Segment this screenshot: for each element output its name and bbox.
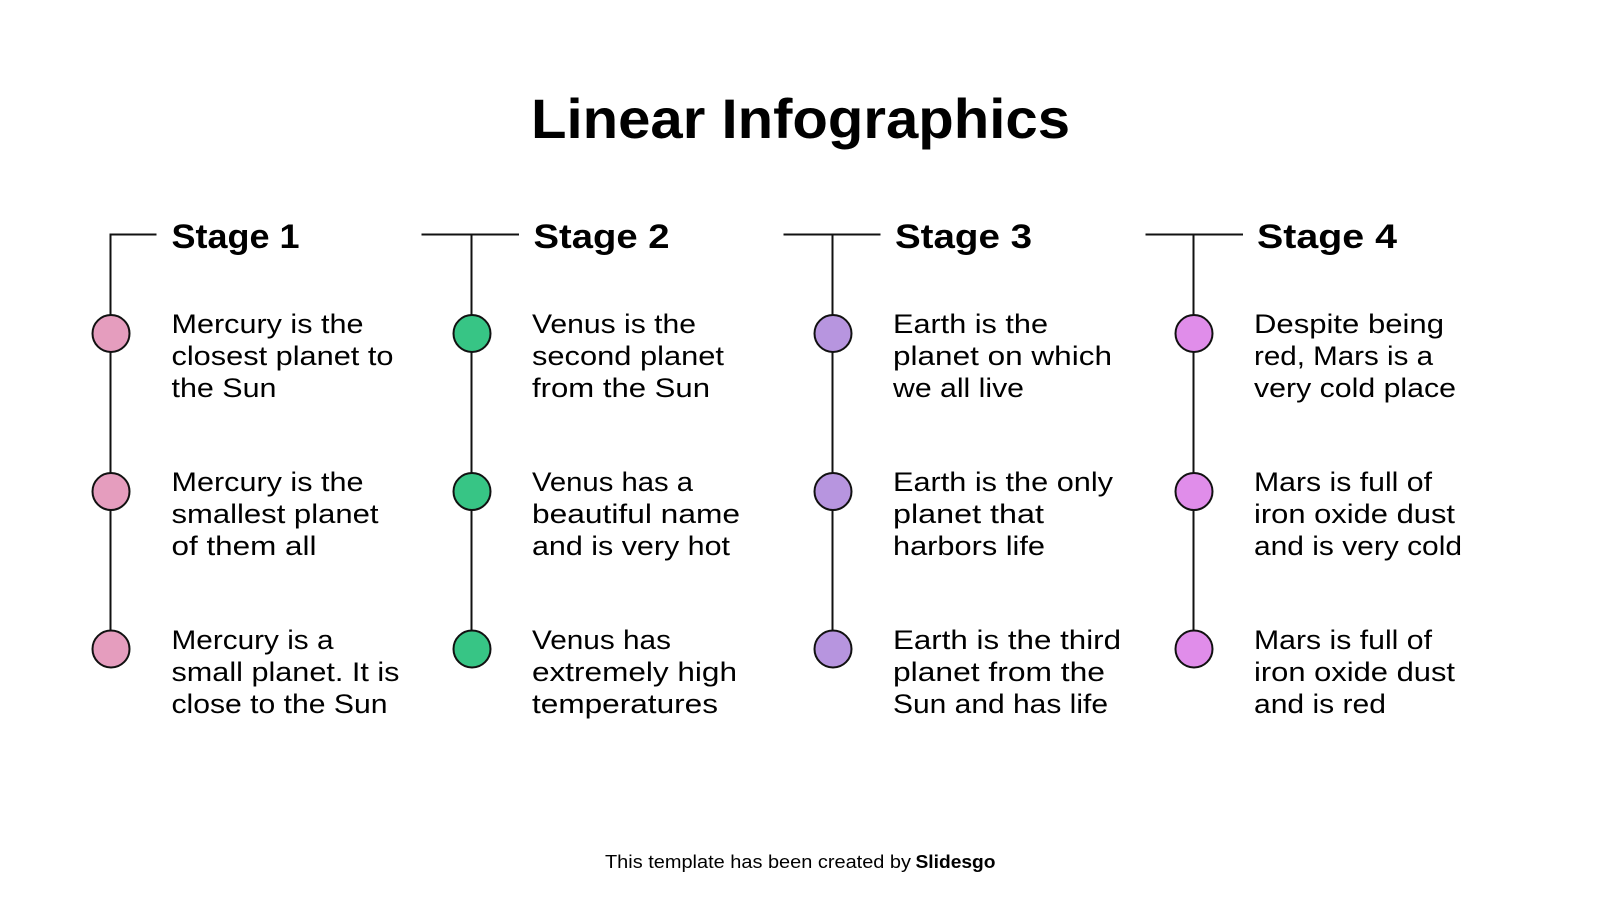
text: stage 2 item 1: Venus is the — [532, 309, 696, 339]
text: stage 2 item 2: Venus has a — [532, 467, 693, 497]
marker: stage 4 item 3 — [1176, 630, 1212, 668]
marker: stage 1 item 3 — [92, 630, 130, 668]
text: stage 3 item 1: we all live — [892, 373, 1024, 403]
text: stage 3 item 3: planet from the — [893, 657, 1105, 687]
panel: stage 3 — [784, 218, 1121, 719]
text: stage 2 item 2: and is very hot — [532, 531, 731, 561]
text: stage 1 item 3: Mercury is a — [172, 625, 334, 655]
footer credit: Slidesgo — [916, 851, 996, 872]
text: stage 4 item 2: and is very cold — [1254, 531, 1462, 561]
text: stage 2 item 1: second planet — [532, 341, 725, 371]
marker: stage 3 item 3 — [814, 630, 852, 668]
text: stage 3 item 2: planet that — [893, 499, 1045, 529]
marker: stage 4 item 2 — [1176, 473, 1212, 510]
text: stage 3 item 3: Sun and has life — [893, 689, 1108, 719]
text: stage 4 item 1: red, Mars is a — [1254, 341, 1433, 371]
text: stage 3 item 3: Earth is the third — [893, 625, 1121, 655]
text: stage 4 item 3: Mars is full of — [1254, 625, 1433, 655]
text: stage 3 item 2: Earth is the only — [893, 467, 1114, 497]
text: stage 3 item 2: harbors life — [893, 531, 1045, 561]
heading: stage 2: Stage 2 — [534, 218, 670, 256]
text: stage 4 item 2: iron oxide dust — [1254, 499, 1456, 529]
marker: stage 1 item 1 — [92, 315, 130, 352]
text: stage 1 item 2: of them all — [172, 531, 316, 561]
text: stage 4 item 1: Despite being — [1254, 309, 1444, 339]
text: stage 1 item 3: small planet. It is — [172, 657, 400, 687]
text: stage 1 item 2: smallest planet — [172, 499, 379, 529]
text: stage 1 item 2: Mercury is the — [172, 467, 364, 497]
text: stage 3 item 1: planet on which — [893, 341, 1112, 371]
marker: stage 2 item 1 — [454, 315, 490, 352]
panel: stage 1 — [92, 218, 400, 719]
heading: stage 3: Stage 3 — [895, 218, 1032, 256]
text: stage 4 item 3: iron oxide dust — [1254, 657, 1456, 687]
text: stage 2 item 3: extremely high — [532, 657, 737, 687]
panel: stage 2 — [422, 218, 740, 719]
text: stage 2 item 3: Venus has — [532, 625, 671, 655]
connector line: stage 3 — [784, 234, 880, 649]
text: stage 1 item 3: close to the Sun — [172, 689, 388, 719]
marker: stage 2 item 2 — [454, 473, 490, 510]
text: stage 2 item 1: from the Sun — [532, 373, 710, 403]
text: stage 4 item 3: and is red — [1254, 689, 1386, 719]
heading: stage 1: Stage 1 — [172, 218, 300, 256]
footer credit: This template has been created by — [605, 851, 912, 872]
marker: stage 3 item 2 — [814, 473, 852, 510]
heading: stage 4: Stage 4 — [1257, 218, 1397, 256]
marker: stage 2 item 3 — [454, 630, 490, 668]
marker: stage 4 item 1 — [1176, 315, 1212, 352]
marker: stage 1 item 2 — [92, 473, 130, 510]
text: stage 1 item 1: Mercury is the — [172, 309, 364, 339]
text: stage 3 item 1: Earth is the — [893, 309, 1048, 339]
panel: stage 4 — [1146, 218, 1462, 719]
marker: stage 3 item 1 — [814, 315, 852, 352]
connector line: stage 4 — [1146, 234, 1243, 649]
connector line: stage 1 — [110, 234, 156, 649]
text: stage 2 item 2: beautiful name — [532, 499, 740, 529]
text: stage 1 item 1: closest planet to — [172, 341, 394, 371]
text: stage 1 item 1: the Sun — [172, 373, 276, 403]
text: stage 4 item 1: very cold place — [1254, 373, 1456, 403]
text: stage 4 item 2: Mars is full of — [1254, 467, 1433, 497]
title: Linear Infographics — [531, 87, 1070, 150]
text: stage 2 item 3: temperatures — [532, 689, 718, 719]
connector line: stage 2 — [422, 234, 519, 649]
